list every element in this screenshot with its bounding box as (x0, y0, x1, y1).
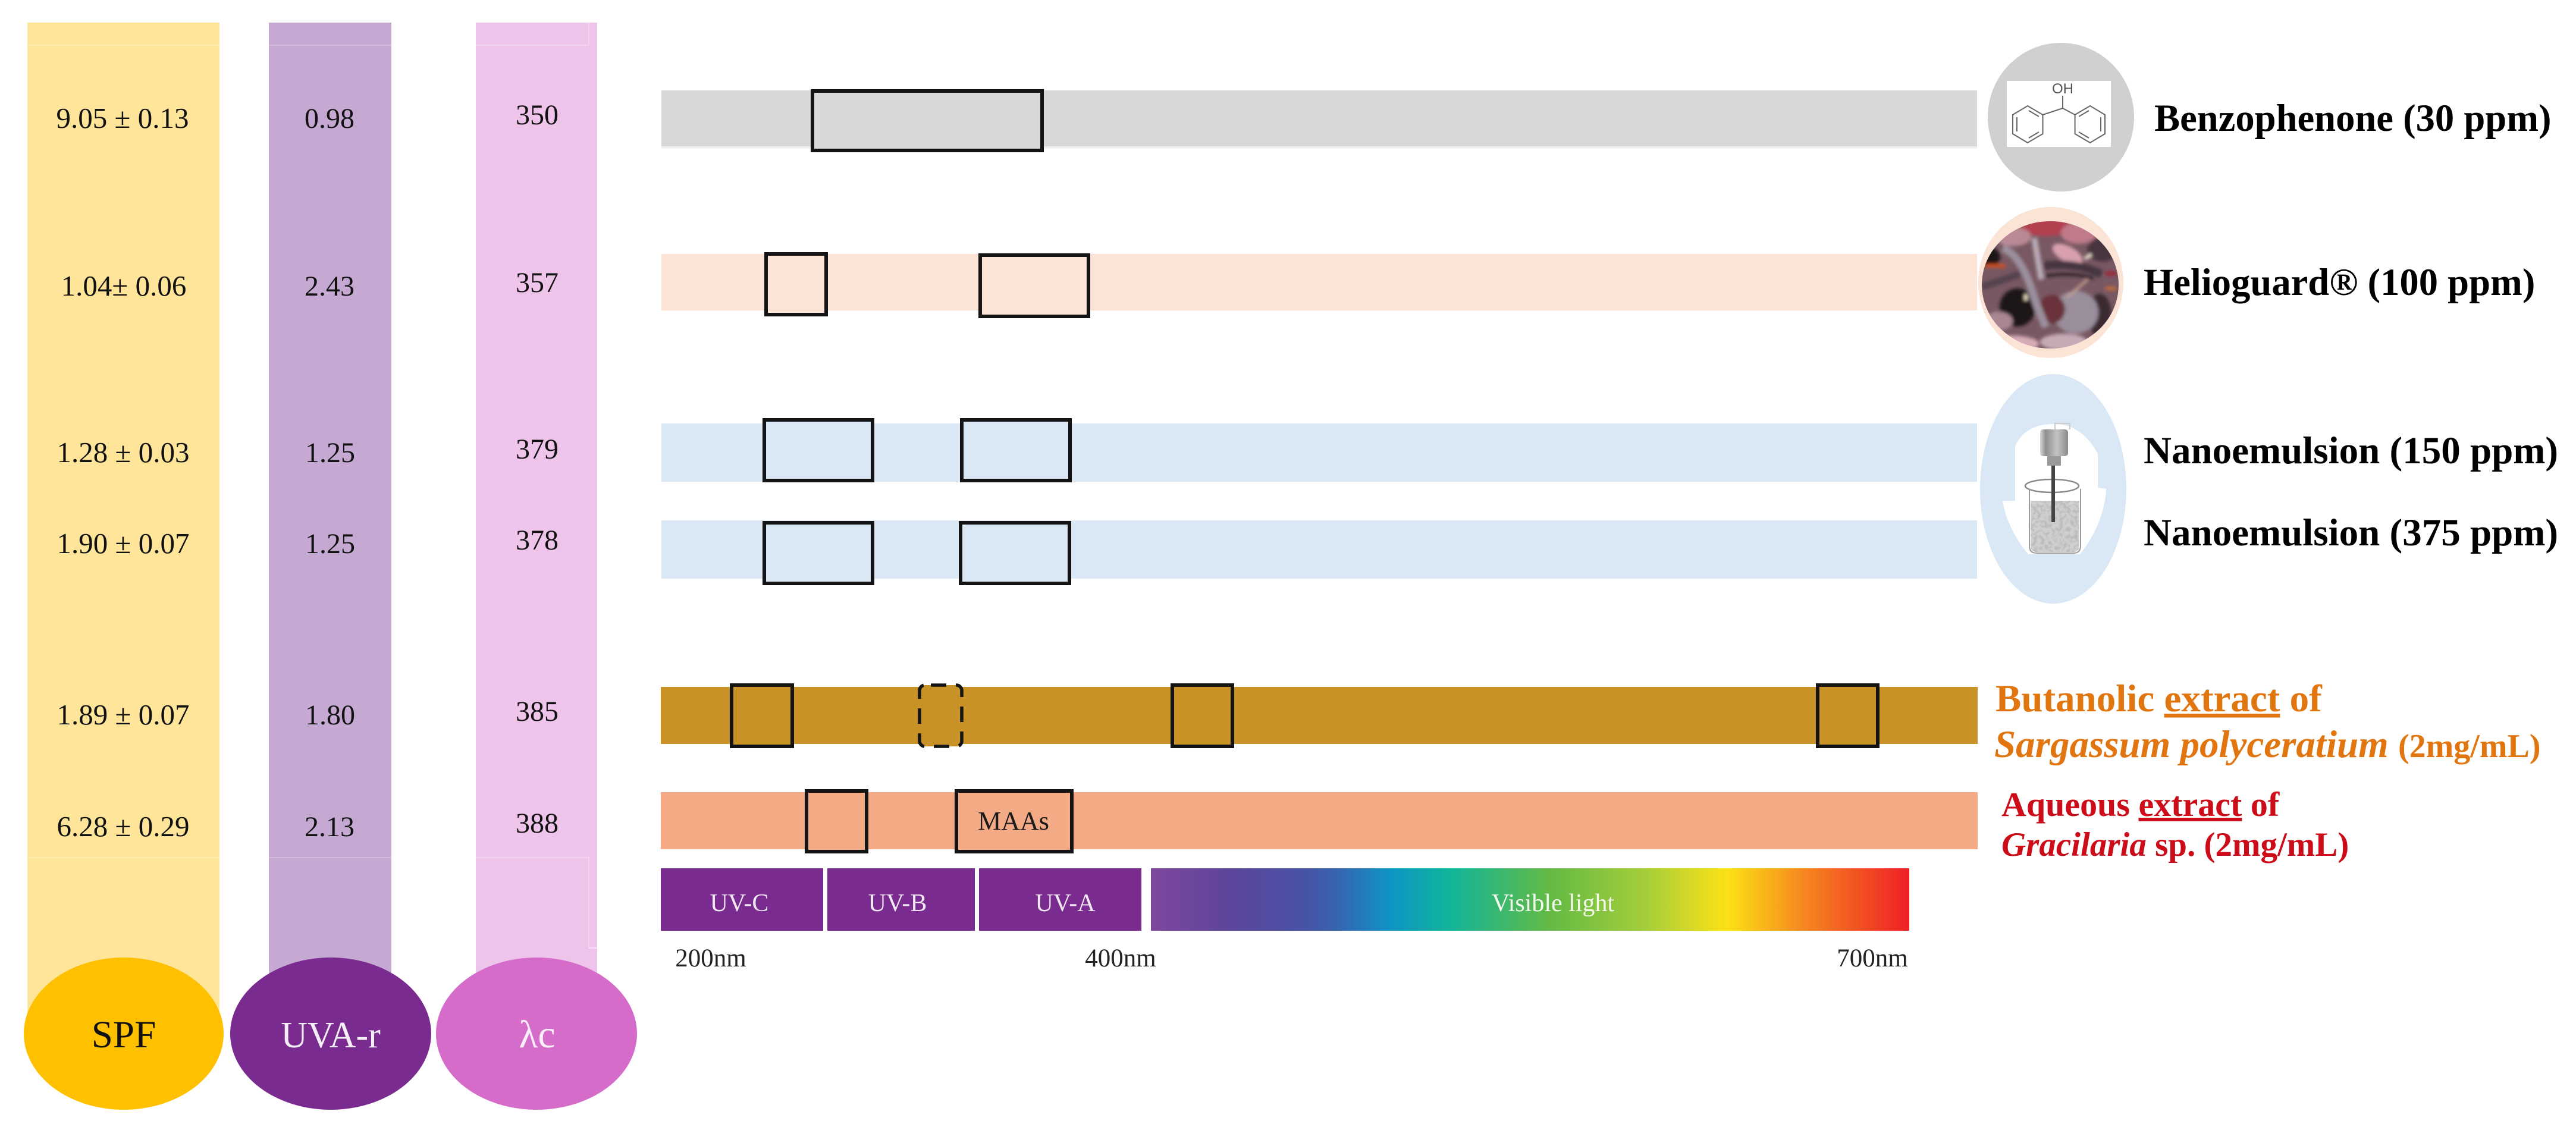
label: Gracilaria aqueous extract (2001, 785, 2349, 864)
absorption peak box 3 (1172, 685, 1232, 746)
UVA-r header oval (230, 958, 431, 1110)
wavelength scale (661, 868, 1909, 972)
absorption bar: benzophenone (661, 90, 1977, 150)
icon: Helioguard seaweed photo (1978, 207, 2123, 358)
absorption peak box left (764, 523, 873, 583)
200nm tick label: 200nm (675, 944, 746, 972)
absorption bar: nanoemulsion 375 ppm (661, 520, 1977, 583)
UVA-r value: nanoemulsion 150 ppm: 1.25 (305, 437, 355, 469)
SPF header oval (24, 958, 224, 1110)
UVA-r value: Sargassum extract: 1.80 (305, 699, 355, 731)
critical wavelength header oval: λc (519, 1013, 556, 1056)
wavelength value: Gracilaria extract: 388 (516, 808, 559, 839)
SPF value: nanoemulsion 150 ppm: 1.28 ± 0.03 (57, 436, 189, 469)
icon: nanoemulsion homogenizer (1980, 374, 2126, 604)
absorption peak box dashed (920, 685, 962, 746)
wavelength value: nanoemulsion 150 ppm: 379 (516, 434, 559, 465)
absorption peak box 1 (732, 685, 792, 746)
UV-B segment (827, 868, 975, 931)
SPF value: Helioguard: 1.04± 0.06 (61, 269, 186, 302)
700nm tick label: 700nm (1837, 944, 1908, 972)
wavelength value: Sargassum extract: 385 (516, 696, 559, 727)
UVA-r value: nanoemulsion 375 ppm: 1.25 (305, 528, 355, 560)
label: Sargassum butanolic extract: Butanolic extract of (1995, 677, 2323, 720)
visible light spectrum: Visible light (1492, 890, 1614, 917)
label: nanoemulsion 375 ppm: Nanoemulsion (375 ppm) (2144, 511, 2558, 554)
UV-C segment: UV-C (710, 890, 768, 917)
absorption bar: nanoemulsion 150 ppm (661, 420, 1977, 482)
wavelength value: Helioguard: 357 (516, 267, 559, 299)
UV-A segment: UV-A (1035, 890, 1096, 917)
UV-A segment (979, 868, 1141, 931)
absorption peak box right (961, 523, 1069, 583)
400nm tick label: 400nm (1085, 944, 1156, 972)
label: Gracilaria aqueous extract: Aqueous extract of (2001, 785, 2280, 824)
label: Sargassum butanolic extract: Sargassum polyceratium (2mg/mL) (1994, 723, 2541, 766)
beaker with emulsion (2025, 466, 2082, 554)
UVA-r value: Helioguard: 2.43 (305, 271, 354, 302)
critical wavelength header oval (436, 958, 637, 1110)
panel: UVA-r column (230, 23, 431, 1110)
UVA-r value: Gracilaria extract: 2.13 (305, 811, 354, 843)
panel: SPF column (24, 23, 224, 1110)
UVA-r value: benzophenone: 0.98 (305, 103, 354, 134)
label: Sargassum butanolic extract (1994, 677, 2541, 766)
label: Gracilaria aqueous extract: Gracilaria sp. (2mg/mL) (2001, 826, 2349, 864)
SPF value: Gracilaria extract: 6.28 ± 0.29 (57, 810, 189, 843)
SPF value: Sargassum extract: 1.89 ± 0.07 (57, 698, 189, 731)
absorption peak box (807, 791, 867, 852)
wavelength value: benzophenone: 350 (516, 99, 559, 131)
UV-B segment: UV-B (868, 890, 927, 917)
absorption bar: Gracilaria aqueous extract (661, 791, 1978, 852)
absorption bar: Sargassum butanolic extract (661, 685, 1978, 746)
UVA-r header oval: UVA-r (281, 1015, 381, 1056)
SPF value: nanoemulsion 375 ppm: 1.90 ± 0.07 (57, 527, 189, 560)
critical wavelength column band (476, 23, 597, 1034)
homogenizer motor (2040, 423, 2070, 466)
absorption peak box left (764, 420, 873, 481)
absorption peak box 4 (1818, 685, 1878, 746)
SPF value: benzophenone: 9.05 ± 0.13 (57, 102, 189, 134)
absorption peak box (812, 91, 1042, 150)
UV-C segment (661, 868, 823, 931)
icon: benzophenone structure (1988, 43, 2134, 192)
icon: benzophenone structure: OH (2052, 81, 2073, 97)
MAAs peak box: MAAs (978, 806, 1049, 836)
UVA-r column band (269, 23, 391, 1034)
absorption peak box right (962, 420, 1070, 481)
label: benzophenone: Benzophenone (30 ppm) (2154, 96, 2552, 139)
absorption peak box UV-A (980, 255, 1088, 316)
SPF header oval: SPF (92, 1013, 156, 1056)
MAAs peak box (956, 791, 1072, 852)
label: nanoemulsion 150 ppm: Nanoemulsion (150 ppm) (2144, 429, 2558, 472)
absorption peak box UV-C/B (766, 254, 826, 315)
panel: critical wavelength column (436, 23, 637, 1110)
SPF column band (27, 23, 219, 1034)
wavelength value: nanoemulsion 375 ppm: 378 (516, 525, 559, 556)
absorption bar: Helioguard (661, 254, 1977, 316)
visible light spectrum (1151, 868, 1909, 931)
label: Helioguard: Helioguard® (100 ppm) (2144, 260, 2535, 303)
